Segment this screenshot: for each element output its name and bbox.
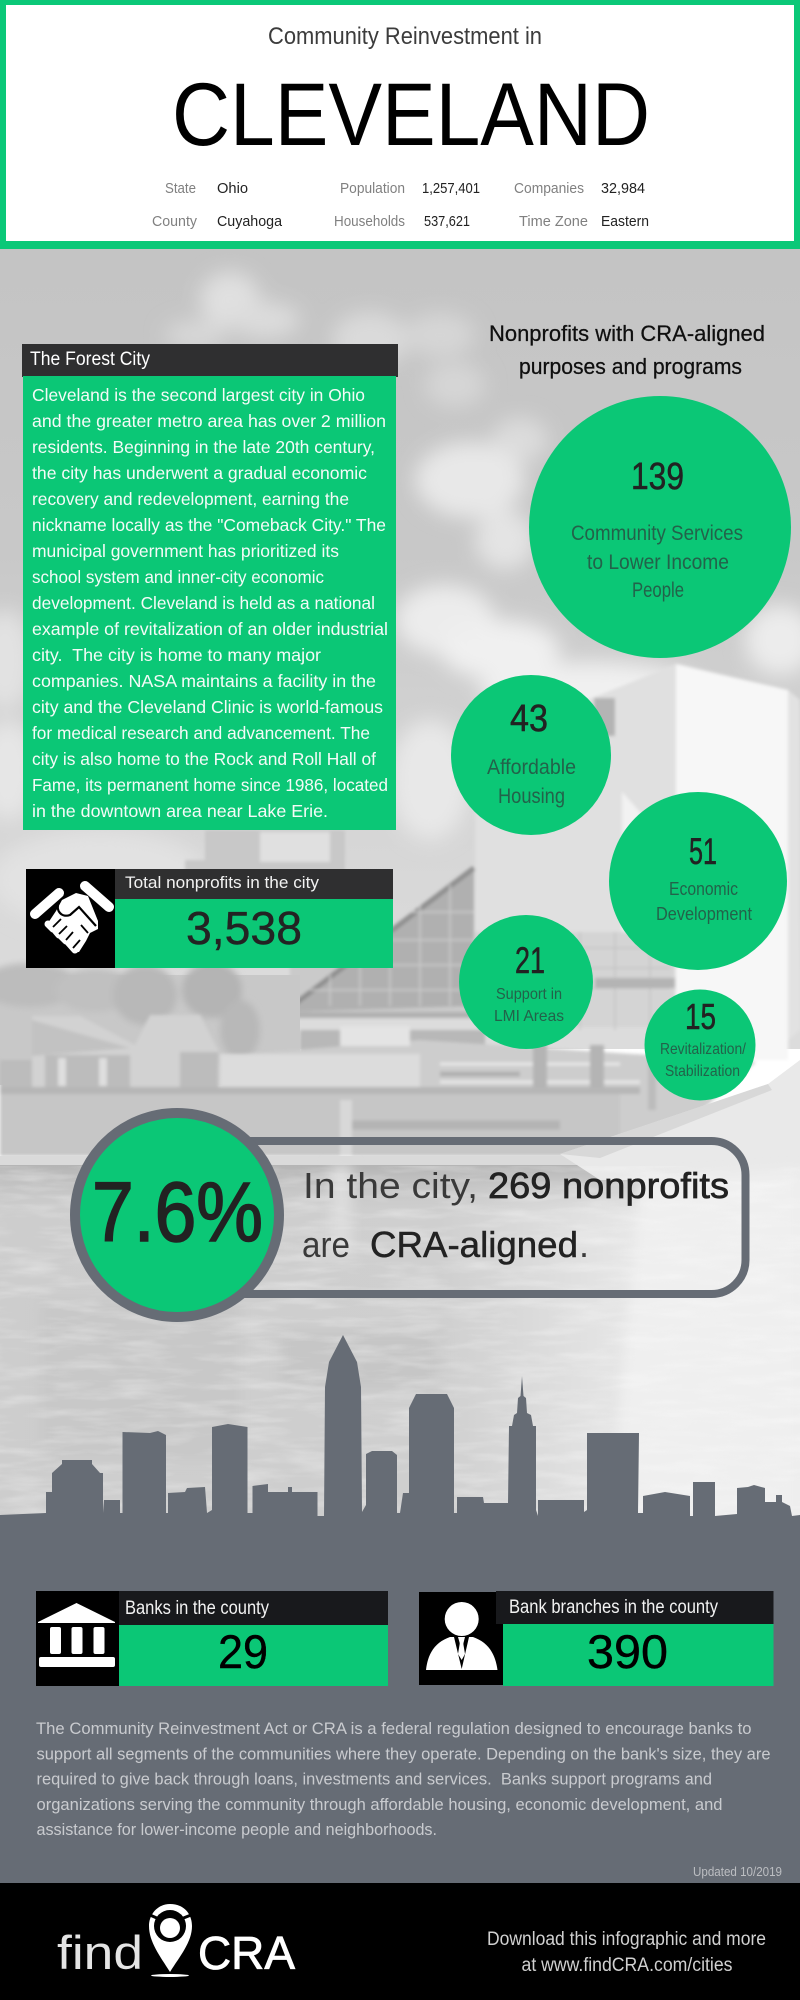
panel body text: school system and inner-city economic — [32, 567, 324, 587]
icon: business person — [426, 1602, 498, 1670]
logo: findCRA: find — [57, 1926, 143, 1979]
text block: about the CRA — [36, 1720, 770, 1839]
bubble: affordable housing — [451, 675, 611, 835]
city stats: Ohio — [217, 180, 248, 197]
panel body text: and the greater metro area has over 2 million — [32, 411, 386, 431]
bubble: revitalization: Revitalization/ — [660, 1041, 746, 1058]
heading: nonprofits with CRA-aligned purposes: purposes and programs — [519, 354, 742, 379]
panel body text: in the downtown area near Lake Erie. — [32, 801, 328, 821]
callout sentence: In the city, — [303, 1165, 478, 1206]
text block: about the CRA: support all segments of the communities where they operate. Depending on the bank's size, they are — [36, 1746, 770, 1764]
icon: handshake — [35, 886, 109, 952]
bubble: community services: to Lower Income — [587, 551, 729, 574]
city stats: Eastern — [601, 213, 649, 230]
bubble: affordable housing: 43 — [510, 698, 548, 740]
text block: about the CRA: assistance for lower-income people and neighborhoods. — [36, 1821, 437, 1839]
city stats: Companies — [514, 180, 584, 197]
callout sentence: 269 nonprofits — [488, 1165, 729, 1206]
bubble: economic development: 51 — [689, 831, 717, 872]
bubble: support in LMI areas: 21 — [515, 940, 545, 981]
bubble: economic development — [609, 792, 787, 970]
stat card: banks in the county — [36, 1591, 388, 1686]
panel body text — [32, 385, 388, 821]
bubble: support in LMI areas: Support in — [496, 986, 562, 1003]
city stats: County — [152, 213, 197, 230]
download call to action: Download this infographic and more — [487, 1929, 766, 1950]
bubble: affordable housing: Affordable — [487, 756, 576, 779]
panel body text: example of revitalization of an older industrial — [32, 619, 388, 639]
bubble: support in LMI areas — [459, 915, 593, 1049]
panel body text: city and the Cleveland Clinic is world-famous — [32, 697, 383, 717]
percentage: 7.6% — [92, 1165, 263, 1259]
icon: location pin — [149, 1904, 192, 1977]
icon: bank building — [38, 1603, 115, 1667]
callout sentence: . — [579, 1224, 589, 1265]
stat card: total nonprofits — [26, 869, 393, 968]
background photo: Cleveland waterfront — [0, 249, 800, 1520]
panel body text: the city has underwent a gradual economic — [32, 463, 367, 483]
subtitle: Community Reinvestment in — [268, 23, 542, 50]
card number: 29 — [218, 1625, 268, 1678]
city stats: Households — [334, 213, 405, 230]
city stats: Time Zone — [519, 213, 588, 230]
text block: about the CRA: organizations serving the community through affordable housing, economic development, and — [36, 1796, 722, 1814]
panel body text: Fame, its permanent home since 1986, located — [32, 775, 388, 795]
panel body text: for medical research and advancement. The — [32, 723, 370, 743]
download call to action — [487, 1929, 766, 1976]
text block: about the CRA: required to give back through loans, investments and services. Banks support programs and — [36, 1770, 712, 1788]
panel body text: companies. NASA maintains a facility in the — [32, 671, 376, 691]
city skyline silhouette and lower panel — [0, 1335, 800, 1883]
panel body text: development. Cleveland is held as a national — [32, 593, 375, 613]
bubble: economic development: Development — [656, 904, 752, 924]
bubble: revitalization: Stabilization — [665, 1063, 740, 1080]
panel body text: municipal government has prioritized its — [32, 541, 339, 561]
footer — [0, 1883, 800, 2000]
panel: The Forest City — [22, 344, 398, 830]
logo: findCRA: CRA — [198, 1927, 295, 1979]
panel body text: recovery and redevelopment, earning the — [32, 489, 349, 509]
bubble: support in LMI areas: LMI Areas — [494, 1008, 564, 1025]
callout sentence — [302, 1165, 729, 1265]
panel body text: residents. Beginning in the late 20th century, — [32, 437, 375, 457]
city title: CLEVELAND — [172, 64, 650, 164]
logo: findCRA — [57, 1904, 295, 1979]
city stats: Cuyahoga — [217, 213, 283, 230]
callout sentence: are — [302, 1224, 350, 1265]
bubble: community services: 139 — [631, 456, 684, 498]
city stats: 32,984 — [601, 180, 645, 197]
panel body text: city is also home to the Rock and Roll Hall of — [32, 749, 376, 769]
bubble: revitalization — [644, 990, 756, 1100]
stat card: bank branches in the county — [419, 1591, 774, 1686]
city stats — [152, 180, 649, 230]
heading: nonprofits with CRA-aligned purposes: Nonprofits with CRA-aligned — [489, 321, 765, 346]
bubble: community services: Community Services — [571, 522, 743, 545]
card label: Banks in the county — [125, 1598, 269, 1619]
bubble: community services: People — [632, 579, 684, 602]
card label: Bank branches in the county — [509, 1597, 718, 1618]
city stats: State — [165, 180, 196, 197]
bubble: affordable housing: Housing — [498, 785, 565, 808]
callout sentence: CRA-aligned — [370, 1224, 578, 1265]
header panel — [0, 0, 800, 249]
bubble: community services — [529, 396, 791, 658]
panel body text: nickname locally as the "Comeback City." The — [32, 515, 386, 535]
city stats: 1,257,401 — [422, 180, 480, 197]
panel heading: The Forest City — [30, 349, 150, 370]
card label: Total nonprofits in the city — [125, 873, 320, 892]
card number: 390 — [587, 1625, 668, 1678]
update date: Updated 10/2019 — [693, 1865, 782, 1879]
bubble: economic development: Economic — [669, 879, 738, 899]
text block: about the CRA: The Community Reinvestment Act or CRA is a federal regulation designed to encourage banks to — [36, 1720, 752, 1738]
city stats: 537,621 — [424, 213, 470, 230]
heading: nonprofits with CRA-aligned purposes — [489, 321, 765, 379]
download call to action: at www.findCRA.com/cities — [522, 1955, 732, 1976]
bubble: revitalization: 15 — [685, 996, 716, 1037]
city stats: Population — [340, 180, 405, 197]
callout: CRA-aligned share — [75, 1113, 746, 1317]
card number: 3,538 — [186, 902, 302, 954]
panel body text: city. The city is home to many major — [32, 645, 321, 665]
panel body text: Cleveland is the second largest city in Ohio — [32, 385, 365, 405]
